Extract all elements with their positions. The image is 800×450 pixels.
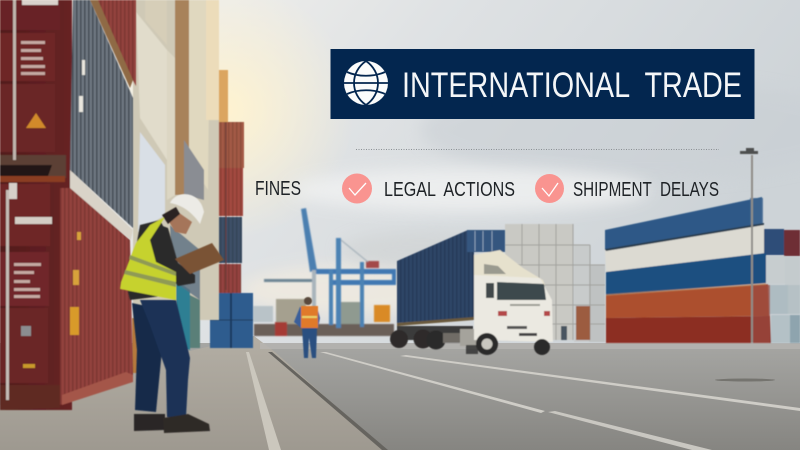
inspector worker with clipboard [120,194,224,433]
worker legs [132,300,210,433]
title banner [330,49,754,119]
big left red and grey containers [0,0,136,410]
consequence list [255,174,719,204]
ground: road and sidewalk [0,336,800,450]
truck with blue container [390,230,553,355]
dotted divider [356,148,719,150]
label: fines: FINES [255,178,301,200]
distant crane and port [253,208,396,336]
sky background [0,0,800,350]
worker with orange vest [294,297,320,358]
icon: globe [344,61,388,105]
mid-left warm container stack [206,70,253,348]
item: legal actions [342,174,515,204]
clipboard [175,243,224,274]
item: shipment delays [535,174,719,203]
item: shipment delays: SHIPMENT DELAYS [573,179,719,201]
beige containers behind [132,0,219,373]
safety vest [120,217,176,300]
head and hard hat [162,194,204,234]
distant container stacks [505,224,605,342]
right container stack [605,148,800,343]
worker torso and arm [128,220,195,300]
item: legal actions: LEGAL ACTIONS [384,179,515,201]
